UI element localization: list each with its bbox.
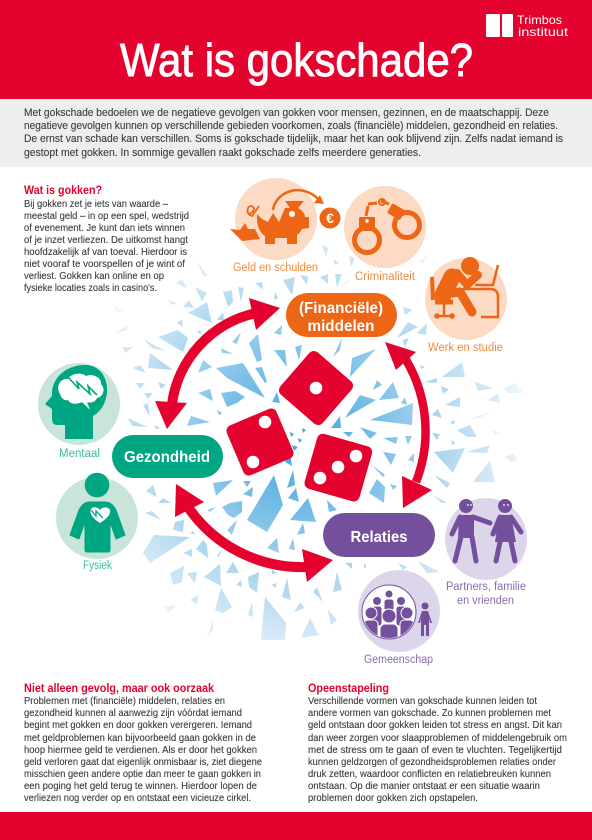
logo: Trimbos instituut <box>486 13 569 39</box>
text block: Wat is gokken: meestal geld – in op een spel, wedstrijd <box>24 210 189 222</box>
panel: intro: De ernst van schade kan verschillen. Soms is gokschade tijdelijk, maar het kan ook blijvend zijn. Zelfs nadat iemand is <box>24 133 563 145</box>
pill: Gezondheid <box>112 435 223 478</box>
text block: Niet alleen gevolg, maar ook oorzaak: een poging het geld terug te winnen. Hierdoor lopen de <box>24 780 257 792</box>
text block: Wat is gokken: niet vooraf te voorspellen of je wint of <box>24 258 185 270</box>
panel: intro: Met gokschade bedoelen we de negatieve gevolgen van gokken voor mensen, gezinnen, en de maatschappij. Deze <box>24 107 549 119</box>
text block: Opeenstapeling: met de stress om te gaan of even te vluchten. Tegelijkertijd <box>308 744 562 756</box>
text block: Niet alleen gevolg, maar ook oorzaak: misschien geen andere optie dan meer te gaan gokken in <box>24 768 261 780</box>
label: Werk en studie: Werk en studie <box>428 342 503 354</box>
text block: Opeenstapeling <box>308 683 567 804</box>
panel: intro <box>0 99 592 167</box>
logo: Trimbos instituut: instituut <box>518 25 569 39</box>
header band <box>0 0 592 99</box>
icon: Criminaliteit <box>344 186 426 268</box>
pill: (Financiële) middelen <box>286 293 397 337</box>
text block: Niet alleen gevolg, maar ook oorzaak: hoop hiermee geld te verdienen. Als er door het gokken <box>24 744 257 756</box>
pill: (Financiële) middelen: (Financiële) <box>299 300 383 317</box>
icon: Mentaal <box>38 363 120 445</box>
text block: Opeenstapeling: andere vormen van gokschade. Zo kunnen problemen met <box>308 707 551 719</box>
pill: Gezondheid: Gezondheid <box>124 449 210 466</box>
pill: Relaties <box>323 513 435 557</box>
label: Partners, familie en vrienden <box>446 581 526 607</box>
icon: Werk en studie <box>425 257 507 340</box>
label: Partners, familie en vrienden: Partners, familie <box>446 581 526 593</box>
text block: Opeenstapeling: dan weer zorgen voor slaapproblemen of middelengebruik om <box>308 732 567 744</box>
label: Gemeenschap: Gemeenschap <box>364 654 433 666</box>
text block: Wat is gokken: Wat is gokken? <box>24 185 102 197</box>
panel: intro: negatieve gevolgen kunnen op verschillende gebieden voorkomen, zoals (financiële) middelen, gezondheid en relaties. <box>24 120 558 132</box>
text block: Niet alleen gevolg, maar ook oorzaak <box>24 683 262 804</box>
arrow: Gezondheid to middelen (double headed) <box>155 298 280 429</box>
text block: Wat is gokken: of evenement. Je kunt dan iets winnen <box>24 222 185 234</box>
panel: intro: gestopt met gokken. In sommige gevallen raakt gokschade zelfs meerdere generaties. <box>24 147 421 159</box>
label: Fysiek: Fysiek <box>83 560 112 572</box>
text block: Niet alleen gevolg, maar ook oorzaak: Niet alleen gevolg, maar ook oorzaak <box>24 683 215 695</box>
text block: Opeenstapeling: geld ontstaan door gokken leiden tot stress en angst. Dit kan <box>308 719 562 731</box>
arrow: Relaties to Gezondheid (double headed) <box>175 484 333 582</box>
pill: Relaties: Relaties <box>350 529 408 546</box>
text block: Niet alleen gevolg, maar ook oorzaak: met geldproblemen kan bijvoorbeeld gaan gokken in de <box>24 732 256 744</box>
text block: Niet alleen gevolg, maar ook oorzaak: geld verloren gaat dat eigenlijk onmisbaar is, ziet diegene <box>24 756 262 768</box>
text block: Opeenstapeling: druk zetten, waardoor conflicten en relatiebreuken kunnen <box>308 768 551 780</box>
text block: Wat is gokken <box>24 185 189 294</box>
label: Criminaliteit: Criminaliteit <box>355 271 416 283</box>
label: Geld en schulden: Geld en schulden <box>233 262 318 274</box>
text block: Wat is gokken: hoofdzakelijk af van toeval. Hierdoor is <box>24 246 187 258</box>
icon: Fysiek <box>56 473 138 559</box>
text block: Opeenstapeling: Verschillende vormen van gokschade kunnen leiden tot <box>308 695 537 707</box>
arrow: middelen to Relaties (double headed) <box>385 342 432 508</box>
text block: Wat is gokken: Bij gokken zet je iets van waarde – <box>24 198 168 210</box>
icon: Geld en schulden: € <box>326 210 334 226</box>
text block: Wat is gokken: of je inzet verliezen. De uitkomst hangt <box>24 234 188 246</box>
icon: Geld en schulden <box>230 178 340 260</box>
title: Wat is gokschade? <box>120 34 473 86</box>
text block: Opeenstapeling: problemen door gokken zich opstapelen. <box>308 792 478 804</box>
icon: Partners, familie en vrienden <box>445 498 527 580</box>
text block: Wat is gokken: fysieke locaties zoals in casino's. <box>24 282 157 294</box>
label: Partners, familie en vrienden: en vrienden <box>457 595 514 607</box>
text block: Niet alleen gevolg, maar ook oorzaak: gezondheid kunnen al aanwezig zijn vóórdat iemand <box>24 707 242 719</box>
text block: Niet alleen gevolg, maar ook oorzaak: begint met gokken en door gokken verergeren. Iemand <box>24 719 252 731</box>
text block: Niet alleen gevolg, maar ook oorzaak: verliezen nog verder op en ontstaat een vicieuze cirkel. <box>24 792 251 804</box>
text block: Opeenstapeling: Opeenstapeling <box>308 683 389 695</box>
logo: Trimbos instituut: Trimbos <box>517 13 562 27</box>
footer band <box>0 812 592 840</box>
text block: Wat is gokken: verliest. Gokken kan online en op <box>24 270 164 282</box>
icon: die with three pips <box>303 432 374 503</box>
icon: die with one pip <box>276 348 356 428</box>
label: Mentaal: Mentaal <box>59 448 100 460</box>
text block: Opeenstapeling: kunnen geldzorgen of gezondheidsproblemen relaties onder <box>308 756 556 768</box>
pill: (Financiële) middelen: middelen <box>308 318 374 335</box>
icon: die with two pips <box>225 407 295 477</box>
text block: Opeenstapeling: ontstaan. Op die manier ontstaat er een situatie waarin <box>308 780 540 792</box>
text block: Niet alleen gevolg, maar ook oorzaak: Problemen met (financiële) middelen, relaties en <box>24 695 225 707</box>
icon: Gemeenschap <box>358 570 440 652</box>
shattered glass background <box>113 244 525 640</box>
